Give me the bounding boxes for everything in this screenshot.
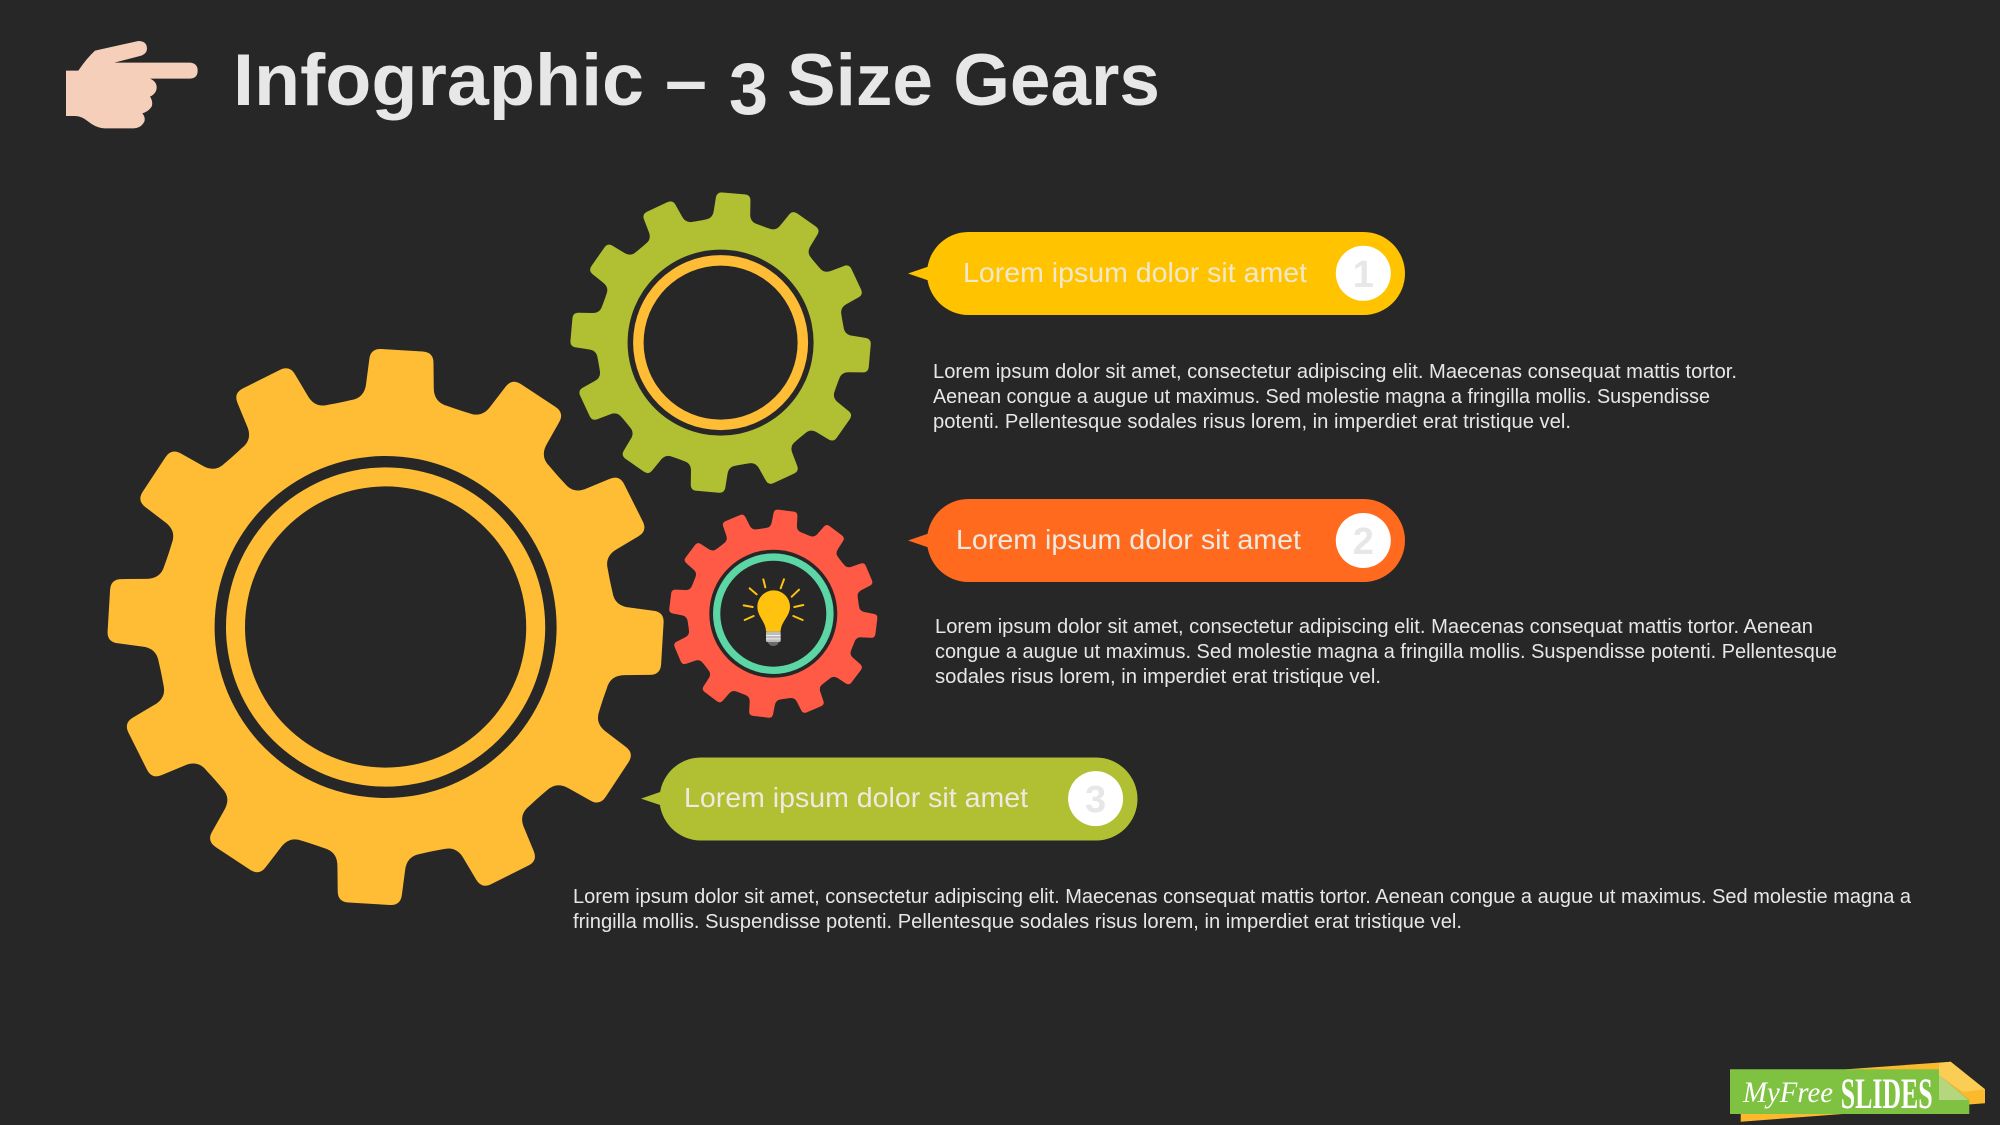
text: description 3: Lorem ipsum dolor sit amet, consectetur adipiscing elit. Maecenas consequat mattis tortor. Aenean congue a augue ut maximus. Sed molestie magna a xyxy=(573,886,1912,908)
logo: MyFreeSlides: SLIDES xyxy=(1841,1071,1933,1118)
title: Infographic – xyxy=(233,40,707,121)
icon: pointing hand xyxy=(66,41,198,128)
text: description 2: sodales risus lorem, in imperdiet erat tristique vel. xyxy=(935,666,1381,688)
title: Size Gears xyxy=(787,40,1160,121)
title xyxy=(233,40,1160,130)
title: 3 xyxy=(729,49,768,130)
pill: heading 2: Lorem ipsum dolor sit amet xyxy=(956,524,1301,555)
pill: heading 1: 1 xyxy=(1353,254,1374,296)
text: description 1 xyxy=(933,361,1737,433)
pill: heading 1: Lorem ipsum dolor sit amet xyxy=(963,257,1307,288)
text: description 3: fringilla mollis. Suspendisse potenti. Pellentesque sodales risus lorem, in imperdiet erat tristique vel. xyxy=(573,911,1462,933)
gear: medium green xyxy=(558,180,883,505)
text: description 2: Lorem ipsum dolor sit amet, consectetur adipiscing elit. Maecenas consequat mattis tortor. Aenean xyxy=(935,616,1813,638)
icon: light bulb xyxy=(744,579,803,646)
pill: heading 3: Lorem ipsum dolor sit amet xyxy=(684,782,1028,813)
pill: heading 3: 3 xyxy=(1085,779,1106,821)
text: description 1: Aenean congue a augue ut maximus. Sed molestie magna a fringilla mollis. Suspendisse xyxy=(933,386,1710,408)
logo: MyFreeSlides xyxy=(1730,1062,1985,1122)
pill: heading 2 xyxy=(908,499,1405,582)
gear: small red xyxy=(658,498,889,729)
logo: MyFreeSlides: MyFree xyxy=(1742,1076,1833,1109)
text: description 2: congue a augue ut maximus. Sed molestie magna a fringilla mollis. Suspendisse potenti. Pellentesque xyxy=(935,641,1837,663)
text: description 3 xyxy=(573,886,1912,933)
pill: heading 3 xyxy=(641,758,1138,840)
pill: heading 2: 2 xyxy=(1353,521,1374,563)
text: description 1: potenti. Pellentesque sodales risus lorem, in imperdiet erat tristique vel. xyxy=(933,411,1571,433)
text: description 1: Lorem ipsum dolor sit amet, consectetur adipiscing elit. Maecenas consequat mattis tortor. xyxy=(933,361,1737,383)
pill: heading 1 xyxy=(908,232,1405,315)
text: description 2 xyxy=(935,616,1837,688)
gear: large yellow xyxy=(92,334,679,920)
